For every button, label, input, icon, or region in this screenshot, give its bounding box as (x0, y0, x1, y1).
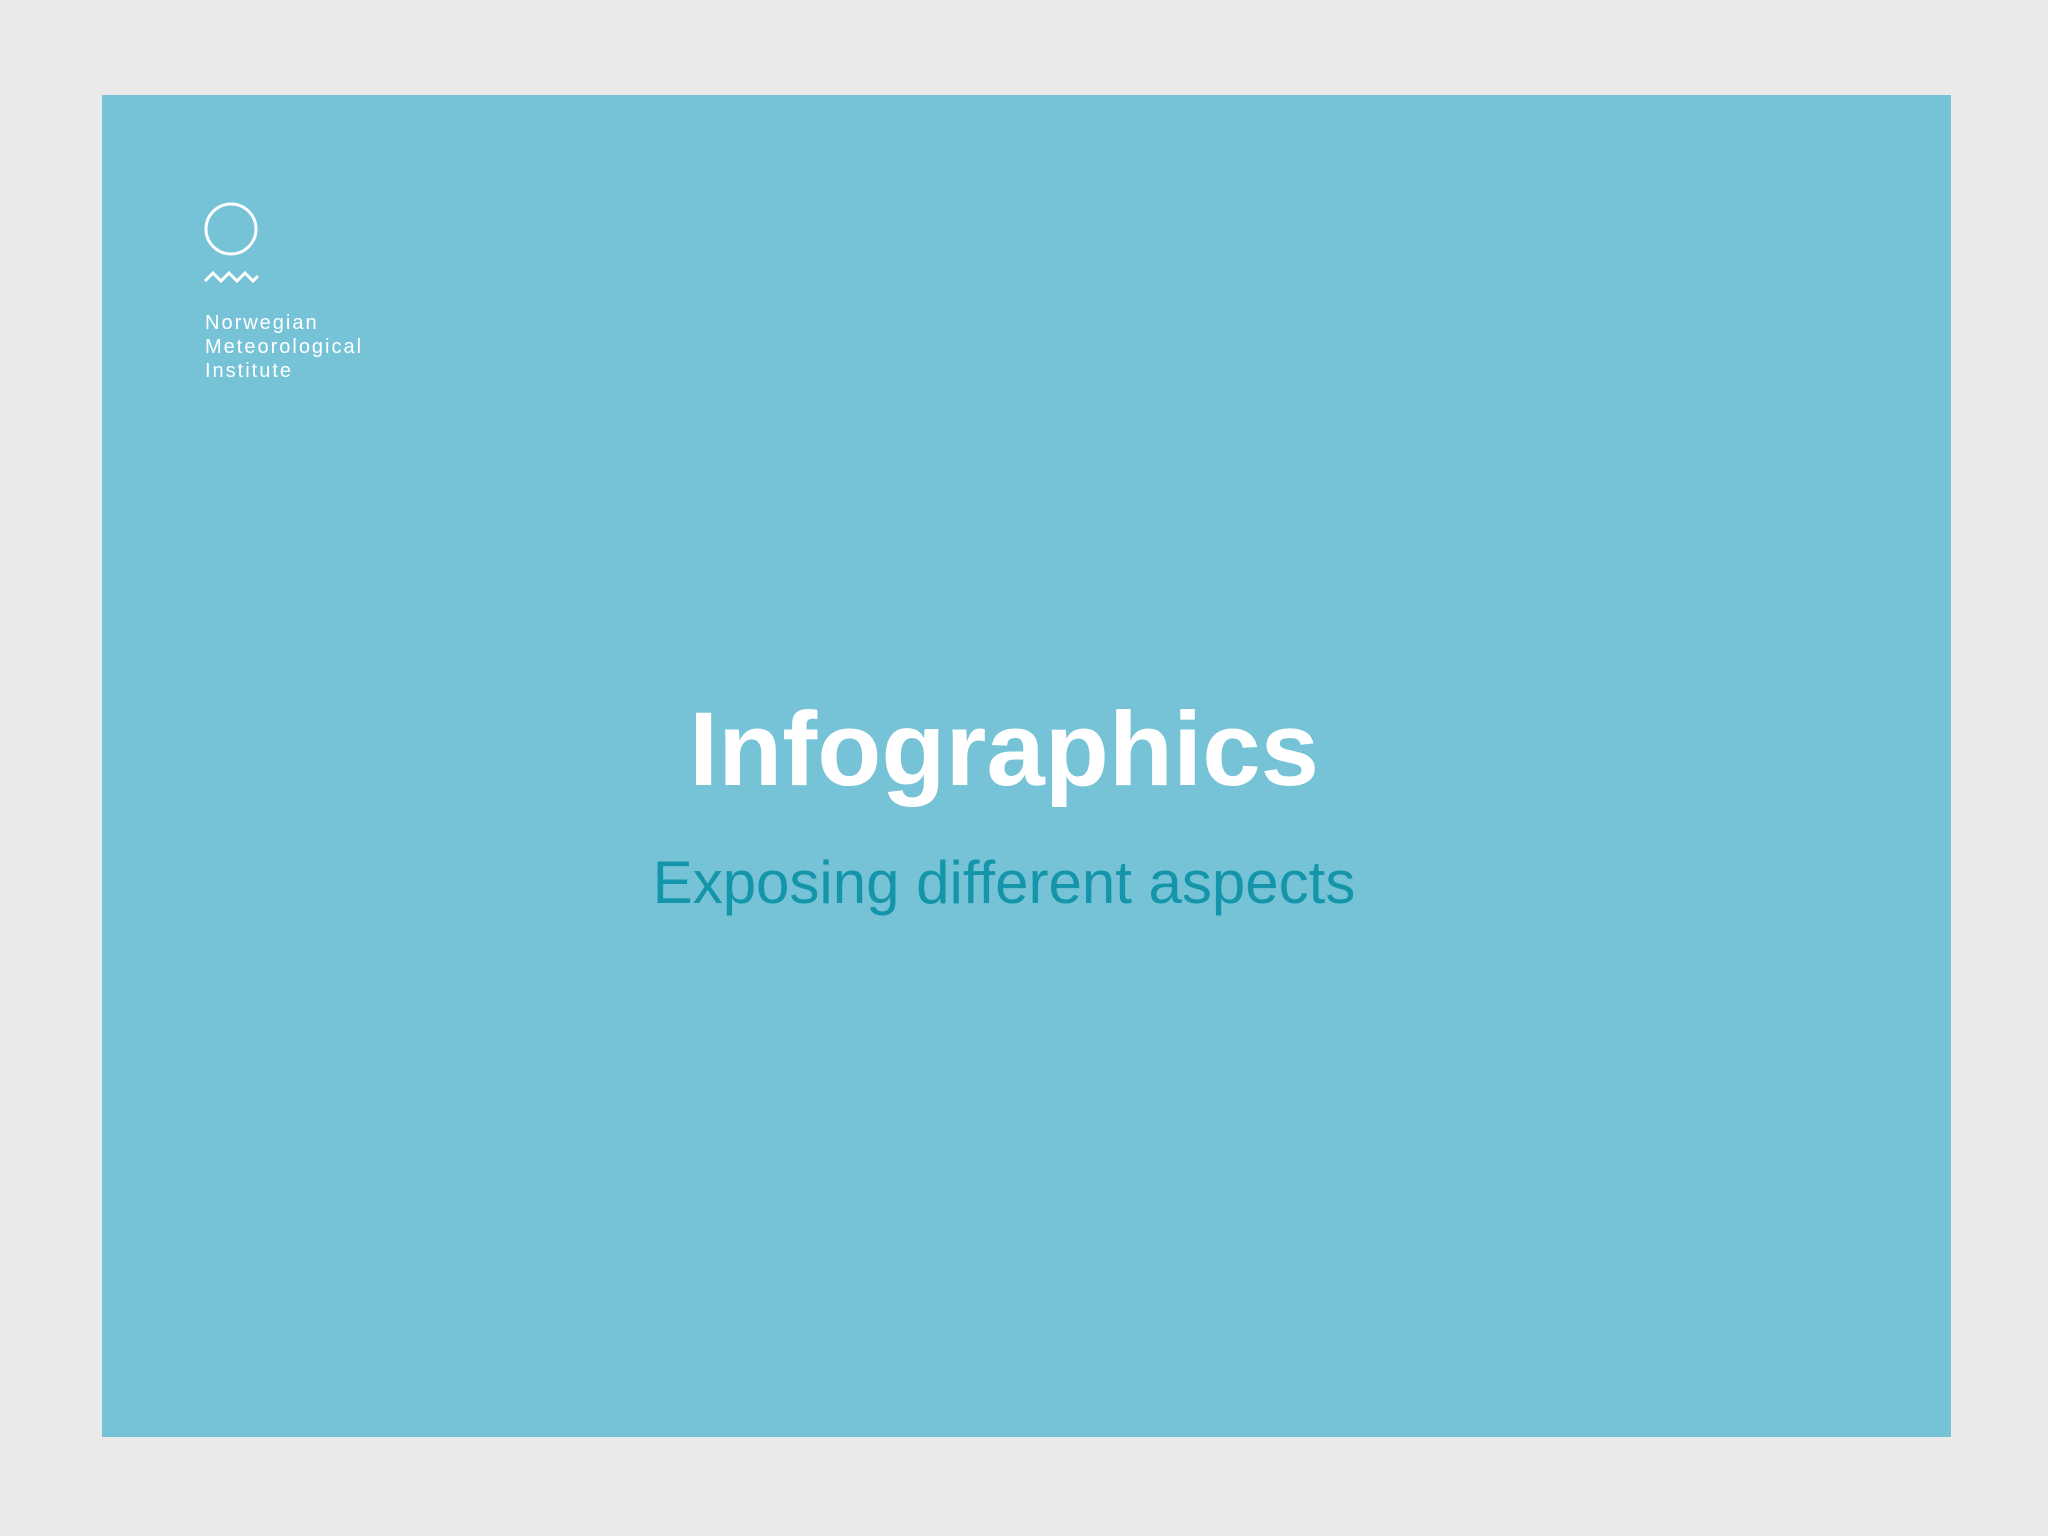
logo text: Norwegian (205, 312, 319, 334)
icon: sun and wave (204, 202, 259, 283)
logo text: Institute (205, 360, 293, 382)
title: Infographics (689, 691, 1319, 808)
subtitle: Exposing different aspects (653, 849, 1355, 916)
logo (204, 202, 363, 382)
panel: title slide (102, 95, 1951, 1437)
logo text (205, 312, 363, 382)
logo text: Meteorological (205, 336, 363, 358)
